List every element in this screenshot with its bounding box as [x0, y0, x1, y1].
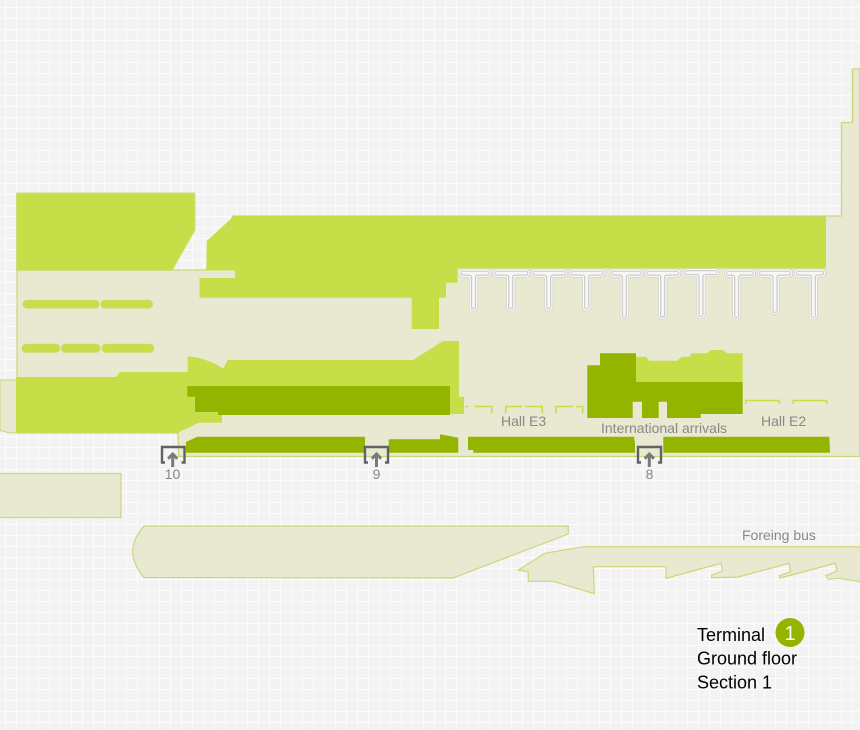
dark block: central hall	[587, 353, 743, 418]
door 8	[638, 447, 661, 482]
legend: terminal, floor and section: Section 1	[697, 672, 772, 692]
area: lower-left block	[16, 341, 464, 433]
legend: terminal, floor and section: Ground floor	[697, 648, 797, 668]
area: central light block	[634, 350, 743, 383]
building: left annex	[0, 380, 17, 433]
platform: foreign bus station	[518, 547, 860, 594]
legend: terminal, floor and section	[697, 618, 804, 692]
door 8: 8	[646, 466, 654, 482]
area: upper long block	[200, 216, 826, 329]
hall labels: Hall E3	[501, 413, 546, 429]
dark block: west hall	[187, 386, 450, 415]
check-in islands	[22, 300, 154, 353]
label: foreign bus: Foreing bus	[742, 527, 816, 543]
building: main terminal floor	[17, 69, 860, 456]
icon: terminal number badge	[776, 618, 804, 647]
platform: left road block	[0, 474, 121, 518]
legend: terminal, floor and section: Terminal	[697, 625, 765, 645]
door 10: 10	[165, 466, 180, 482]
door 9	[365, 447, 388, 482]
legend: terminal, floor and section: 1	[784, 623, 796, 645]
door 10	[162, 447, 184, 482]
area: top-left block	[16, 193, 195, 270]
door 9: 9	[373, 466, 381, 482]
hall labels: International arrivals	[601, 420, 727, 436]
hall labels: Hall E2	[761, 413, 806, 429]
gate piers	[461, 271, 823, 318]
dark bands along the front	[186, 434, 830, 453]
hall labels	[501, 413, 806, 436]
platform: long bus island	[133, 526, 568, 578]
hall partition markers	[465, 400, 827, 414]
